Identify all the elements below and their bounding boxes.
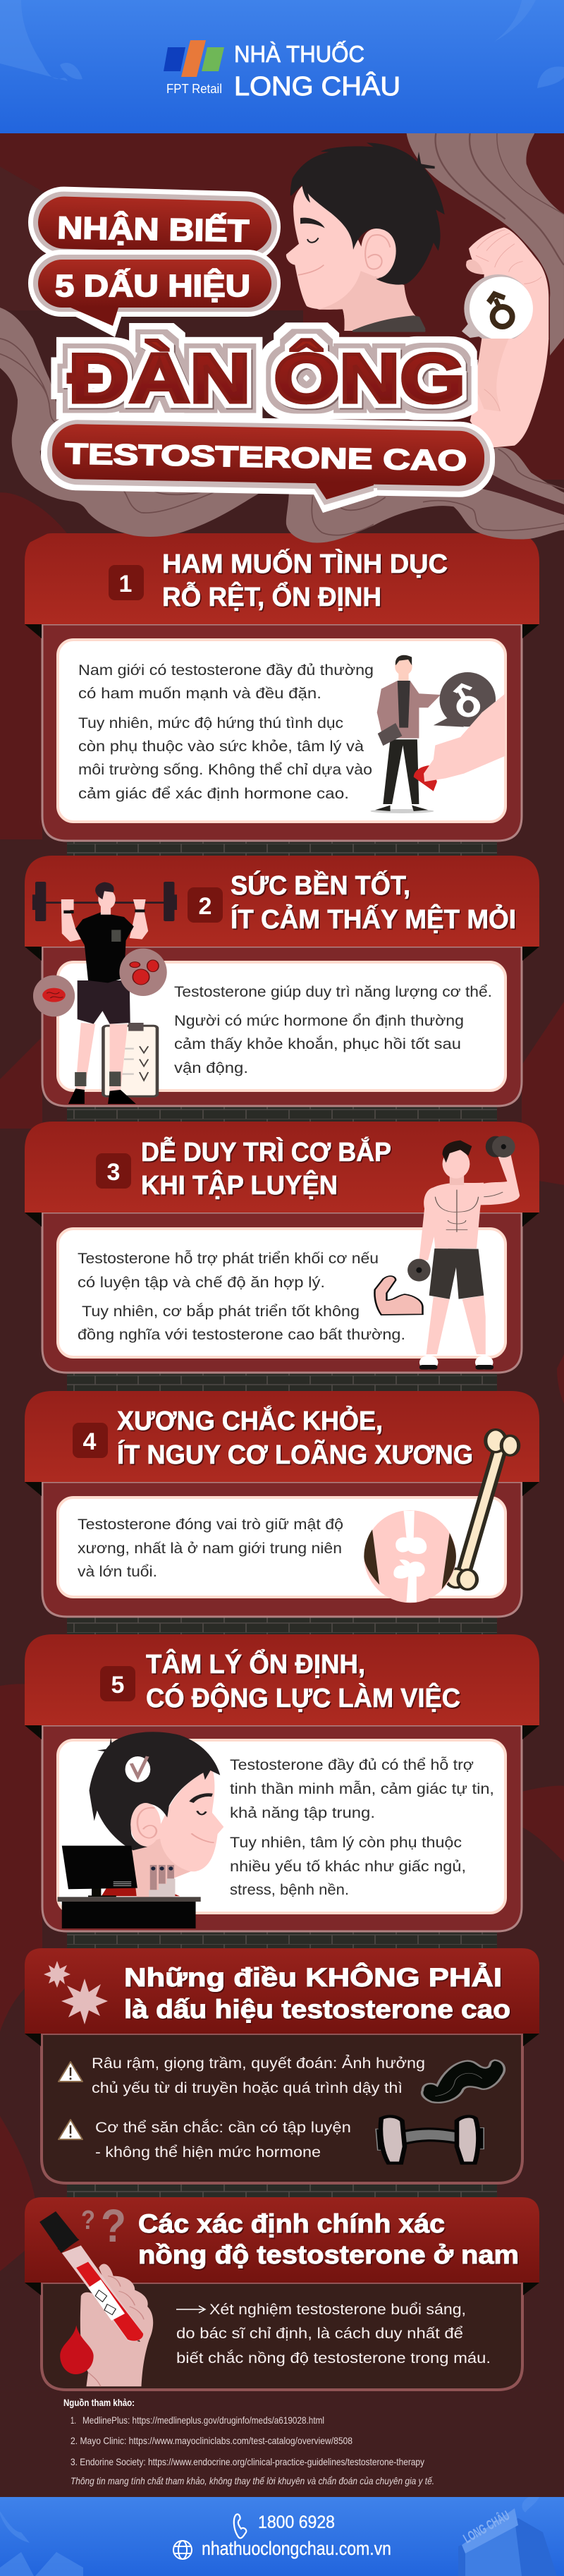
illustration: doctor with hand, heart and male symbol xyxy=(371,655,505,813)
man: shirt xyxy=(352,315,425,332)
heading 2: ÍT CẢM THẤY MỆT MỎI xyxy=(231,904,516,935)
heading 1 xyxy=(162,547,448,612)
body text 4: và lớn tuổi. xyxy=(78,1564,157,1580)
body text 2: Người có mức hormone ổn định thường xyxy=(174,1013,464,1029)
body text 3: Testosterone hỗ trợ phát triển khối cơ nếu xyxy=(78,1251,379,1267)
man: hair xyxy=(290,142,445,285)
text: firm body: - không thể hiện mức hormone xyxy=(95,2144,321,2161)
body text 5: khả năng tập trung. xyxy=(230,1805,375,1821)
body text 1: Tuy nhiên, mức độ hứng thú tình dục xyxy=(78,715,343,731)
panel frame 3 xyxy=(25,1122,539,1373)
logo: pharmacy name: LONG CHÂU xyxy=(234,71,400,102)
panel frame 5 xyxy=(25,1634,539,1931)
heading 5: CÓ ĐỘNG LỰC LÀM VIỆC xyxy=(146,1682,460,1713)
body text 3: Tuy nhiên, cơ bắp phát triển tốt không xyxy=(82,1304,360,1320)
text card 5 xyxy=(58,1740,505,1913)
brick wall behind sections xyxy=(67,832,497,2204)
storefront decoration: LONG CHÂU xyxy=(461,2508,513,2546)
illustration: muscular man with dumbbells xyxy=(374,1136,520,1370)
heading 4 xyxy=(117,1405,473,1470)
panel: sign 5 xyxy=(25,1634,539,1931)
number badge 5 xyxy=(100,1666,135,1701)
heading 6: Những điều KHÔNG PHẢI xyxy=(124,1962,502,1992)
text card 3 xyxy=(58,1229,505,1357)
heading 7 xyxy=(138,2209,519,2269)
references: MedlinePlus: https://medlineplus.gov/druginfo/meds/a619028.html xyxy=(82,2414,324,2426)
barbell xyxy=(32,882,177,921)
body text 2: vận động. xyxy=(174,1060,248,1076)
hero title xyxy=(27,186,496,513)
man: ear xyxy=(360,229,396,278)
heading 2: SỨC BỀN TỐT, xyxy=(231,869,410,901)
heading 5: TÂM LÝ ỔN ĐỊNH, xyxy=(146,1648,365,1679)
body text 5: Tuy nhiên, tâm lý còn phụ thuộc xyxy=(230,1835,462,1851)
number badge 3: 3 xyxy=(107,1159,120,1186)
footer xyxy=(0,2497,564,2576)
man: fist and raised arm xyxy=(466,227,548,339)
man: face and neck xyxy=(286,186,423,331)
speech bubble: NHẬN BIẾT: NHẬN BIẾT xyxy=(57,210,250,248)
number badge 1: 1 xyxy=(119,571,132,597)
text card 4 xyxy=(58,1497,505,1597)
heading 4: XƯƠNG CHẮC KHỎE, xyxy=(117,1405,383,1436)
blood drop xyxy=(60,2326,94,2374)
dumbbell raised xyxy=(486,1136,515,1158)
heading 4: ÍT NGUY CƠ LOÃNG XƯƠNG xyxy=(117,1439,473,1470)
body text 1 xyxy=(78,662,374,802)
speech bubble: TESTOSTERONE CAO xyxy=(40,414,496,513)
logo: FPT Retail mark xyxy=(164,40,224,96)
arrow xyxy=(176,2306,205,2313)
number badge 2 xyxy=(188,887,223,923)
logo: pharmacy name xyxy=(234,40,400,102)
panel: sign 2 xyxy=(25,856,539,1106)
heading 7: nồng độ testosterone ở nam xyxy=(138,2240,519,2269)
storefront decoration xyxy=(458,2497,557,2576)
heading 2 xyxy=(231,869,516,935)
heading 5 xyxy=(146,1648,460,1713)
heading 3: DỄ DUY TRÌ CƠ BẮP xyxy=(141,1136,391,1167)
number badge 5: 5 xyxy=(111,1672,124,1699)
heading 1: RỖ RỆT, ỔN ĐỊNH xyxy=(162,581,381,612)
body text 1: cảm giác để xác định hormone cao. xyxy=(78,786,349,802)
body text 1: còn phụ thuộc vào sức khỏe, tâm lý và xyxy=(78,739,364,755)
text: blood test: biết chắc nồng độ testosterone trong máu. xyxy=(176,2350,491,2367)
hero man illustration xyxy=(286,142,548,343)
desk with monitor xyxy=(58,1846,201,1928)
number badge 4: 4 xyxy=(83,1428,97,1455)
body text 3: có luyện tập và chế độ ăn hợp lý. xyxy=(78,1275,325,1291)
icon: stars xyxy=(44,1961,108,2024)
brain callout xyxy=(33,976,75,1016)
body text 2: Testosterone giúp duy trì năng lượng cơ thể. xyxy=(174,984,492,1000)
smoke shapes in hero, top right xyxy=(407,133,564,356)
body text 4: xương, nhất là ở nam giới trung niên xyxy=(78,1541,342,1557)
heading 3 xyxy=(141,1136,391,1201)
text: blood test: do bác sĩ chỉ định, là cách duy nhất để xyxy=(176,2326,463,2342)
test tube xyxy=(39,2211,143,2342)
speech bubble: 5 DẤU HIỆU xyxy=(28,250,281,337)
heading 7: Các xác định chính xác xyxy=(138,2209,445,2238)
icon: warning 2 xyxy=(59,2120,82,2139)
icon: warning 1 xyxy=(59,2062,82,2082)
text: firm body: Cơ thể săn chắc: cần có tập luyện xyxy=(95,2120,351,2136)
panel frame 6 xyxy=(25,1948,539,2183)
man: lower arm xyxy=(470,339,548,448)
references: Thông tin mang tính chất tham khảo, không thay thế lời khuyên và chẩn đoán của chuyên gia y tế. xyxy=(70,2475,434,2486)
body text 3: đồng nghĩa với testosterone cao bất thường. xyxy=(78,1327,405,1343)
icon: check badge xyxy=(125,1756,150,1782)
logo: pharmacy name: NHÀ THUỐC xyxy=(234,40,364,67)
references: 1. xyxy=(70,2414,76,2426)
hair xyxy=(90,1732,220,1850)
body text 2 xyxy=(174,984,492,1076)
text: beard and voice: Râu rậm, giọng trầm, quyết đoán: Ảnh hưởng xyxy=(92,2055,425,2072)
references: 2. Mayo Clinic: https://www.mayocliniclabs.com/test-catalog/overview/8508 xyxy=(70,2435,352,2446)
man: neck shade xyxy=(317,271,425,331)
icon: dumbbell xyxy=(376,2116,484,2163)
body text 5 xyxy=(230,1757,494,1898)
panel frame 4 xyxy=(25,1391,539,1617)
panel: sign 1 xyxy=(25,533,539,841)
heading 1: HAM MUỐN TÌNH DỤC xyxy=(162,547,448,579)
panel frame 1 xyxy=(25,533,539,841)
hotline number: 1800 6928 xyxy=(258,2513,335,2532)
body text 2: cảm thấy khỏe khoắn, phục hồi tốt sau xyxy=(174,1036,461,1052)
icon: globe xyxy=(173,2541,192,2559)
references: Nguồn tham khảo: xyxy=(63,2397,135,2408)
illustration: bone xyxy=(446,1430,519,1589)
body text 1: có ham muốn mạnh và đều đặn. xyxy=(78,686,321,702)
panel: sign 3 xyxy=(25,1122,539,1373)
icon: phone xyxy=(234,2514,246,2538)
face xyxy=(131,1768,223,1881)
text: blood test xyxy=(176,2302,491,2367)
website: nhathuoclongchau.com.vn xyxy=(202,2538,391,2559)
icon: mustache xyxy=(422,2060,504,2103)
header band with logo xyxy=(0,0,564,133)
blood tubes xyxy=(149,1865,175,1897)
panel: how to determine testosterone xyxy=(25,2197,539,2390)
text card 1 xyxy=(58,640,505,822)
man: eyebrow, eye, mouth xyxy=(298,218,325,275)
text card 2 xyxy=(58,962,505,1090)
text: beard and voice xyxy=(92,2055,425,2096)
text: firm body xyxy=(95,2120,351,2161)
illustration: joint close-up xyxy=(364,1510,456,1603)
body text 3 xyxy=(78,1251,405,1343)
heading 3: KHI TẬP LUYỆN xyxy=(141,1169,338,1201)
number badge 1 xyxy=(109,565,144,600)
panel frame 2 xyxy=(25,856,539,1106)
number badge 3 xyxy=(96,1153,131,1189)
speech bubble: TESTOSTERONE CAO: TESTOSTERONE CAO xyxy=(65,437,467,477)
body text 4: Testosterone đóng vai trò giữ mật độ xyxy=(78,1517,343,1533)
body text 4 xyxy=(78,1517,343,1580)
panel: not signs of high testosterone xyxy=(25,1948,539,2183)
red blood cells callout xyxy=(119,949,167,996)
number badge 4 xyxy=(73,1423,108,1458)
references: 3. Endorine Society: https://www.endocrine.org/clinical-practice-guidelines/testosterone-therapy xyxy=(70,2456,424,2467)
body text 1: môi trường sống. Không thể chỉ dựa vào xyxy=(78,762,372,778)
smoke shapes in hero, left and bottom xyxy=(0,308,282,543)
text: blood test: Xét nghiệm testosterone buổi sáng, xyxy=(209,2302,466,2318)
heading 6 xyxy=(124,1962,510,2024)
body text 5: tinh thần minh mẫn, cảm giác tự tin, xyxy=(230,1781,494,1797)
number badge 2: 2 xyxy=(199,893,212,920)
clipboard checklist xyxy=(103,1023,157,1096)
icon: question marks xyxy=(81,2199,126,2252)
illustration: man at desk xyxy=(58,1732,223,1928)
logo: FPT Retail mark: FPT Retail xyxy=(166,82,222,96)
dumbbell lowered xyxy=(407,1259,431,1282)
speech bubble: NHẬN BIẾT xyxy=(27,186,281,264)
illustration: hand holding blood tube xyxy=(39,2211,153,2386)
icon: question marks: ? xyxy=(81,2206,95,2235)
body text 5: Testosterone đầy đủ có thể hỗ trợ xyxy=(230,1757,474,1773)
heading 6: là dấu hiệu testosterone cao xyxy=(124,1995,510,2024)
references xyxy=(63,2397,434,2486)
smoke shapes in hero, lower right xyxy=(286,447,564,543)
icon: male symbol bubble xyxy=(462,274,533,343)
body text 5: nhiều yếu tố khác như giấc ngủ, xyxy=(230,1859,466,1875)
body text 5: stress, bệnh nền. xyxy=(230,1882,349,1898)
illustration: man lifting barbell xyxy=(32,882,177,1104)
text: beard and voice: chủ yếu từ di truyền hoặc quá trình dậy thì xyxy=(92,2080,403,2096)
main title: ĐÀN ÔNG: ĐÀN ÔNG xyxy=(68,339,465,417)
body text 1: Nam giới có testosterone đầy đủ thường xyxy=(78,662,374,679)
speech bubble: 5 DẤU HIỆU: 5 DẤU HIỆU xyxy=(55,268,250,303)
icon: question marks: ? xyxy=(101,2199,126,2252)
panel frame 7 xyxy=(25,2197,539,2390)
icon: flexed bicep xyxy=(374,1276,422,1315)
panel: sign 4 xyxy=(25,1391,539,1617)
